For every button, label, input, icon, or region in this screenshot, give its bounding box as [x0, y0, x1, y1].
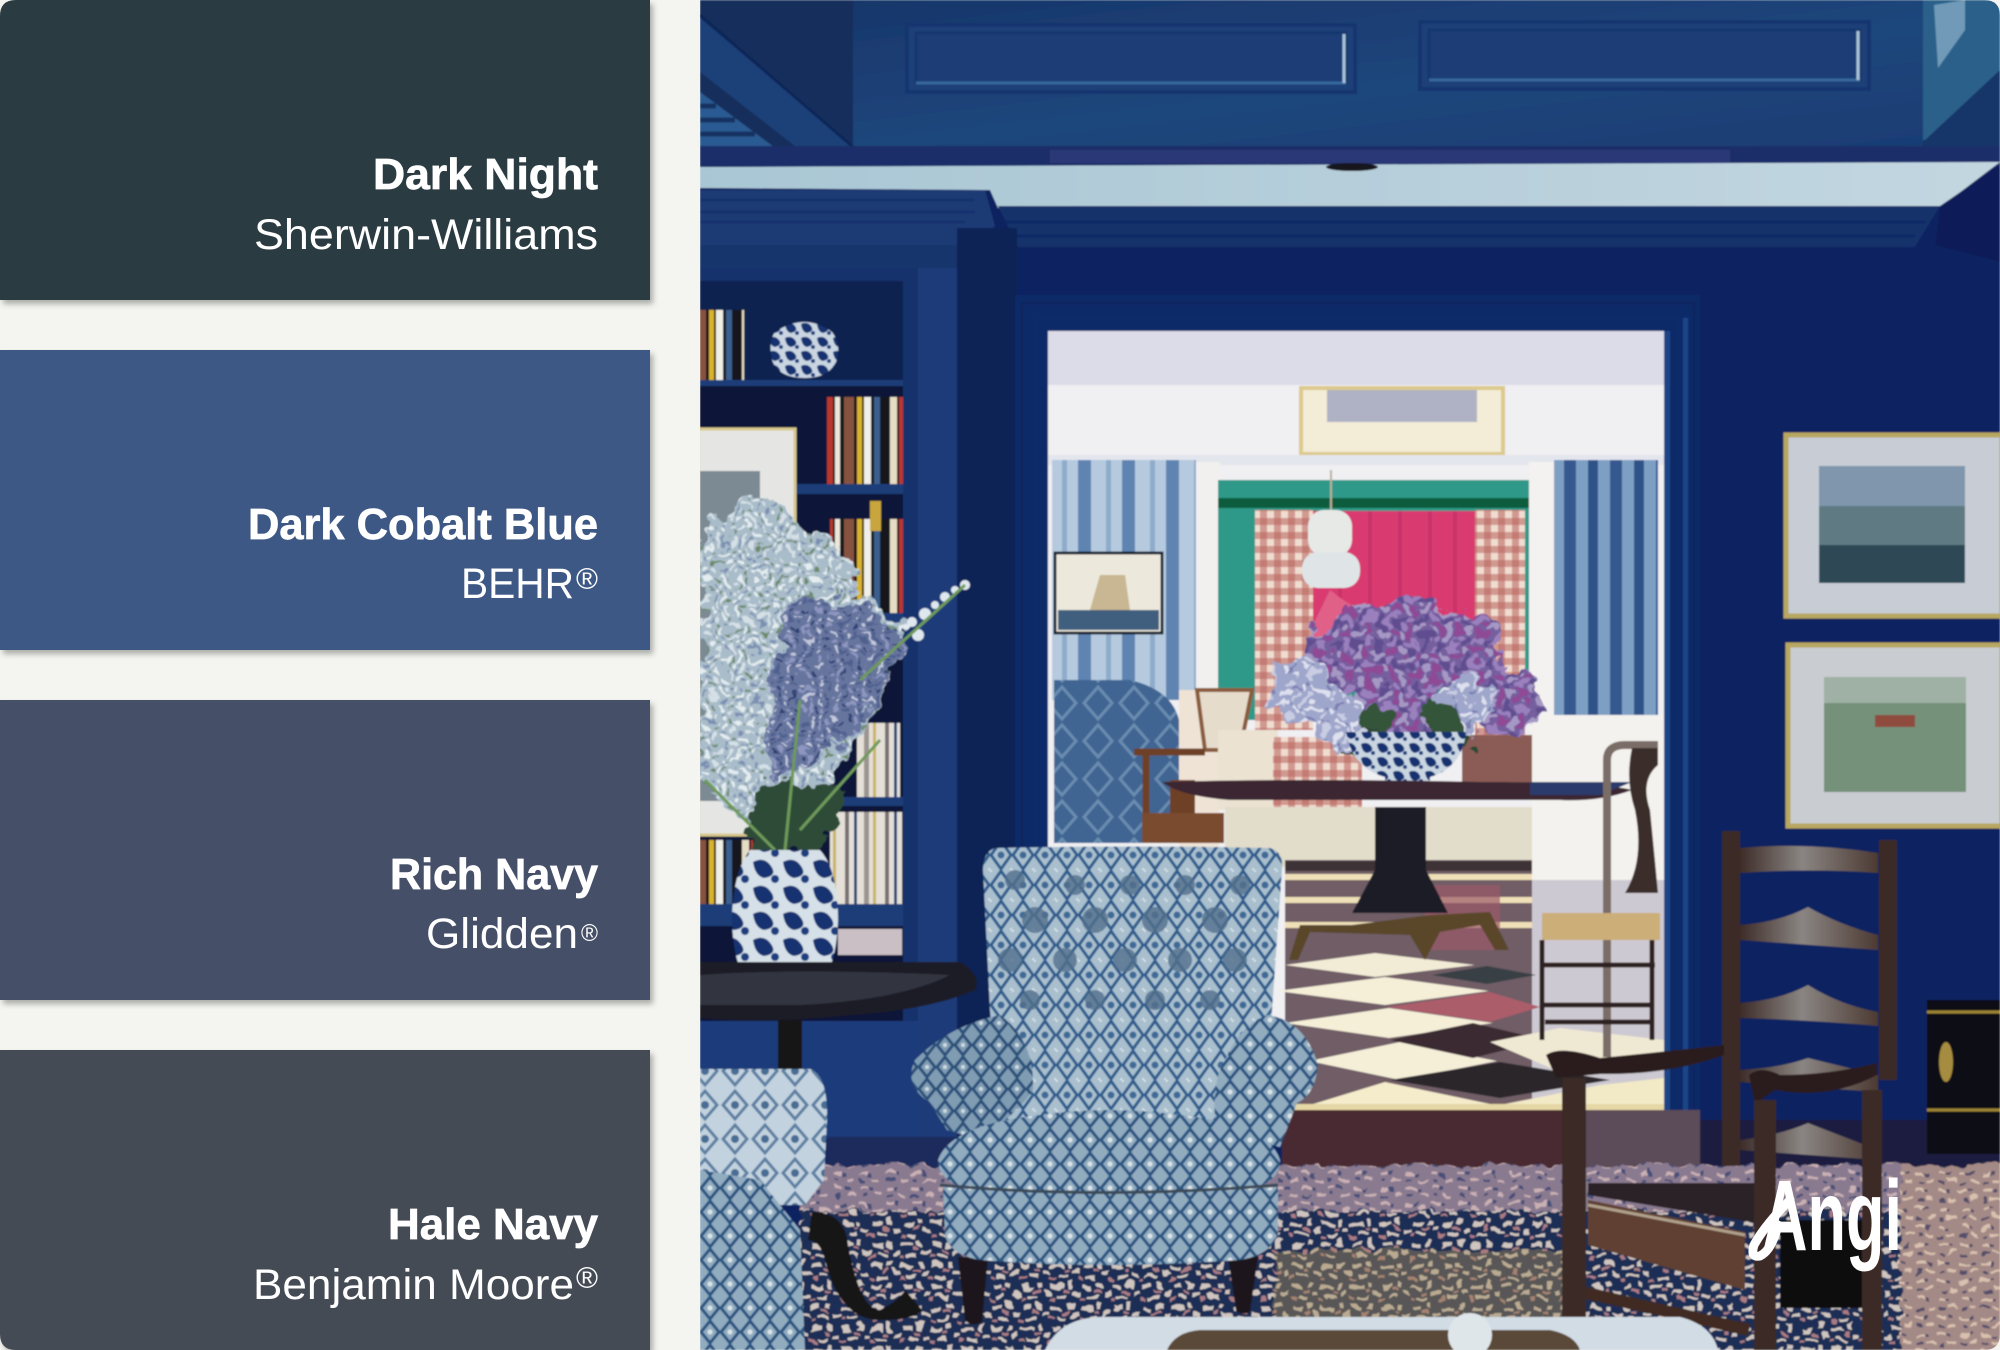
tufted armchair — [911, 846, 1318, 1325]
door trim — [1015, 295, 1700, 1120]
swatch name: Dark Night: Dark Night — [373, 150, 598, 199]
view through the doorway — [1048, 331, 1664, 1111]
flower stems and sprig — [705, 580, 970, 850]
brand: Benjamin Moore: Benjamin Moore — [253, 1261, 574, 1309]
blue and white vase — [732, 850, 838, 988]
chair skirt — [943, 1187, 1278, 1265]
books on second shelf — [827, 397, 903, 484]
crown moulding — [700, 165, 2000, 1138]
left arm — [911, 1015, 1033, 1137]
ginger jar — [771, 322, 838, 378]
tufts — [998, 870, 1250, 1010]
books on lower shelves — [830, 812, 902, 904]
books on top shelf — [700, 310, 744, 380]
panel: Dark Night swatch — [0, 0, 650, 300]
wooden chair in far room — [1134, 752, 1224, 843]
white chair back in far room — [1197, 690, 1252, 750]
far wall framed print — [1301, 388, 1503, 454]
brand: BEHR: BEHR — [461, 560, 574, 608]
checked curtains — [1255, 510, 1525, 740]
pink curtains — [1312, 510, 1476, 638]
built-in bookcase — [700, 268, 957, 1139]
blue sofa in far room — [1054, 680, 1179, 843]
light soffit band — [700, 162, 2000, 208]
round dining table — [1162, 780, 1632, 960]
green far room — [1218, 480, 1529, 720]
curved table leg — [808, 1212, 922, 1320]
right arm — [1214, 1015, 1318, 1147]
delphinium blue centre — [768, 598, 905, 780]
wall print lower — [1788, 645, 2000, 826]
oriental rug — [800, 1165, 2000, 1350]
dark foliage — [750, 783, 845, 852]
chair back — [983, 846, 1282, 1130]
registered mark: ® — [581, 920, 598, 947]
sofa foreground left — [700, 1069, 827, 1350]
panel: Hale Navy swatch — [0, 1050, 650, 1350]
panel: Dark Cobalt Blue swatch — [0, 350, 650, 650]
ceiling with moulded panels — [700, 0, 2000, 150]
striped wallpaper left — [1052, 460, 1196, 700]
logo: Angi: Angi — [1762, 1160, 1902, 1272]
hydrangea arrangement — [1272, 594, 1541, 759]
cream floor behind table — [1225, 807, 1532, 867]
books on middle shelf — [857, 723, 900, 797]
registered mark: ® — [576, 563, 598, 596]
ottoman with tray — [1045, 1313, 1718, 1350]
blue and white bowl — [1346, 732, 1466, 787]
striped wallpaper right — [1554, 460, 1658, 715]
side table — [700, 962, 977, 1070]
delphinium flowers — [700, 490, 905, 852]
panel: Rich Navy swatch — [0, 700, 650, 1000]
brand: Sherwin-Williams: Sherwin-Williams — [254, 211, 598, 259]
red check chair — [1273, 737, 1362, 807]
brand: Glidden: Glidden — [426, 910, 578, 958]
wood floor — [827, 1137, 957, 1167]
ladder-back chair — [1546, 831, 1897, 1350]
swatch name: Rich Navy: Rich Navy — [390, 850, 599, 899]
black chest — [1927, 1000, 2000, 1154]
swatch name: Dark Cobalt Blue: Dark Cobalt Blue — [248, 500, 598, 549]
seat cushion — [938, 1110, 1280, 1195]
panel: navy room photo — [698, 0, 2000, 1350]
registered mark: ® — [576, 1262, 598, 1295]
books on third shelf — [830, 519, 903, 613]
gold rug medallion — [1275, 1250, 1565, 1320]
framed print on bookcase — [698, 429, 795, 835]
wall print upper — [1786, 435, 2000, 616]
far ladder-back chair — [1542, 745, 1660, 1057]
swatch name: Hale Navy: Hale Navy — [388, 1200, 599, 1249]
small ship picture — [1055, 553, 1162, 633]
checkerboard floor — [1277, 860, 1664, 1110]
chair legs — [958, 1257, 1258, 1325]
beam underside — [700, 146, 2000, 166]
chandelier — [1302, 470, 1360, 588]
logo: Angi — [1753, 1160, 1902, 1272]
